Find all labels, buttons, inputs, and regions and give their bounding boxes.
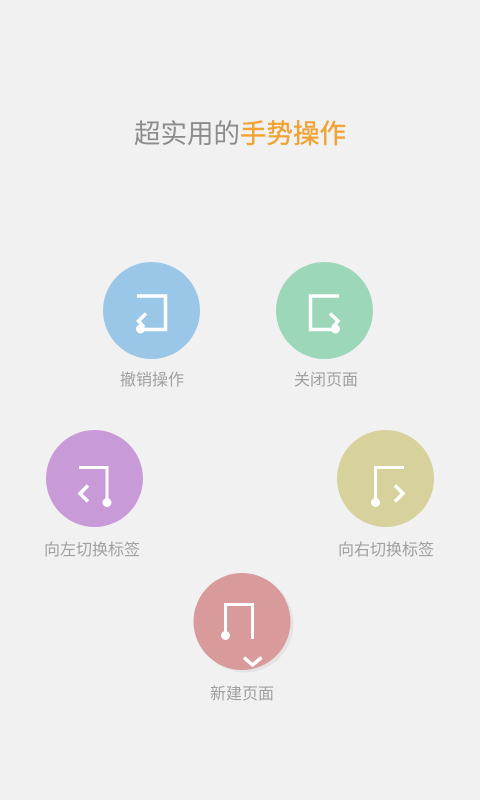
- title: 超实用的手势操作: [134, 119, 346, 149]
- label: close page: 关闭页面: [294, 372, 358, 389]
- label: switch tab left: 向左切换标签: [44, 542, 140, 559]
- label: switch tab right: 向右切换标签: [338, 542, 434, 559]
- icon: close page gesture: [276, 262, 373, 359]
- icon: new page gesture: [194, 573, 294, 672]
- label: undo: 撤销操作: [120, 372, 184, 389]
- icon: undo gesture: [103, 262, 200, 359]
- icon: switch tab left gesture: [46, 430, 143, 527]
- icon: switch tab right gesture: [337, 430, 434, 527]
- label: new page: 新建页面: [210, 686, 274, 703]
